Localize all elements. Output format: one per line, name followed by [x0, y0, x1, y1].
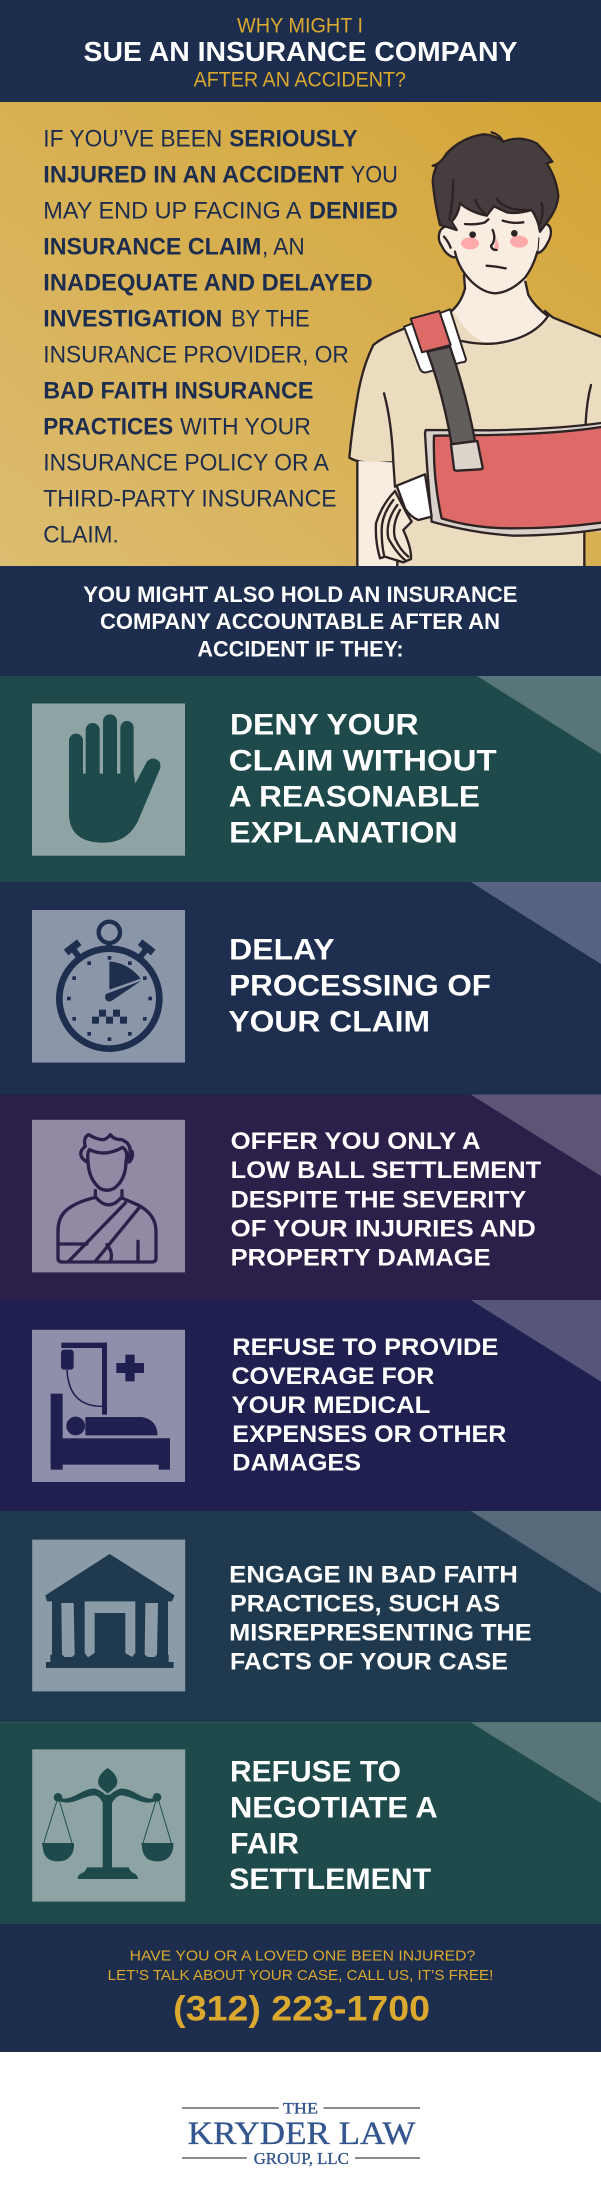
subheading text: [83, 582, 517, 662]
text: low ball: [231, 1129, 542, 1272]
text: negotiate: [229, 1756, 438, 1896]
text: coverage: REFUSE TO PROVIDE: [232, 1335, 498, 1361]
logo: the kryder law group: GROUP, LLC: [254, 2149, 349, 2168]
logo: the kryder law group: KRYDER LAW: [188, 2116, 416, 2152]
icon: stopwatch: [59, 922, 159, 1049]
text: negotiate: NEGOTIATE A: [230, 1792, 438, 1825]
intro paragraph: IF YOU’VE BEEN: [43, 126, 222, 153]
text: bad faith: FACTS OF YOUR CASE: [230, 1649, 508, 1675]
intro paragraph: , AN: [262, 234, 305, 261]
panel: refuse coverage: [0, 1300, 601, 1511]
intro paragraph: THIRD-PARTY INSURANCE: [43, 486, 337, 512]
intro paragraph: INSURANCE CLAIM: [43, 234, 261, 261]
text: bad faith: PRACTICES, SUCH AS: [230, 1591, 500, 1617]
logo: the kryder law group: THE: [283, 2101, 318, 2118]
text: deny: EXPLANATION: [229, 817, 458, 850]
panel: subheading: [0, 566, 601, 676]
text: coverage: [232, 1335, 506, 1477]
phone number: (312) 223-1700: [173, 1989, 430, 2028]
title: main heading: SUE AN INSURANCE COMPANY: [84, 36, 518, 67]
intro paragraph: MAY END UP FACING A: [43, 198, 302, 225]
call to action text: HAVE YOU OR A LOVED ONE BEEN INJURED?: [130, 1948, 475, 1964]
text: coverage: EXPENSES OR OTHER: [232, 1422, 506, 1448]
header panel: [0, 0, 601, 102]
call to action text: LET’S TALK ABOUT YOUR CASE, CALL US, IT’S FREE!: [108, 1968, 493, 1984]
panel: refuse to negotiate: [0, 1722, 601, 1924]
text: low ball: OFFER YOU ONLY A: [231, 1129, 481, 1155]
text: coverage: COVERAGE FOR: [232, 1364, 434, 1390]
text: deny: [229, 708, 497, 850]
subheading text: COMPANY ACCOUNTABLE AFTER AN: [100, 609, 500, 634]
intro paragraph: INVESTIGATION: [43, 306, 222, 332]
panel: call to action: [0, 1924, 601, 2052]
text: coverage: DAMAGES: [232, 1451, 361, 1477]
intro paragraph: BAD FAITH INSURANCE: [43, 378, 314, 404]
subheading text: YOU MIGHT ALSO HOLD AN INSURANCE: [83, 582, 517, 607]
text: low ball: LOW BALL SETTLEMENT: [231, 1158, 542, 1184]
text: deny: CLAIM WITHOUT: [229, 744, 497, 778]
panel: delay processing: [0, 882, 601, 1094]
illustration: injured man with arm sling: [349, 132, 601, 568]
logo: the kryder law group: [182, 2101, 420, 2168]
text: delay: PROCESSING OF: [229, 970, 491, 1003]
text: low ball: DESPITE THE SEVERITY: [231, 1187, 527, 1213]
icon: courthouse: [45, 1554, 175, 1668]
intro paragraph: INSURANCE PROVIDER, OR: [43, 342, 349, 368]
icon: scales of justice: [42, 1768, 173, 1879]
intro paragraph: INSURANCE POLICY OR A: [43, 450, 329, 476]
intro paragraph: [43, 126, 398, 548]
icon: hospital bed: [51, 1343, 170, 1470]
call to action text: [108, 1948, 493, 1984]
text: bad faith: [229, 1562, 532, 1675]
text: low ball: OF YOUR INJURIES AND: [231, 1216, 536, 1242]
intro paragraph: YOU: [351, 162, 398, 189]
icon: injured person: [58, 1135, 156, 1262]
text: bad faith: ENGAGE IN BAD FAITH: [229, 1562, 518, 1588]
text: negotiate: SETTLEMENT: [229, 1863, 431, 1896]
text: low ball: PROPERTY DAMAGE: [231, 1246, 491, 1272]
intro paragraph: CLAIM.: [43, 522, 119, 548]
text: delay: [228, 933, 491, 1039]
title: why might i: WHY MIGHT I: [237, 14, 363, 38]
intro paragraph: INADEQUATE AND DELAYED: [43, 270, 373, 296]
text: deny: DENY YOUR: [230, 708, 419, 742]
icon: raised hand: [69, 714, 160, 843]
intro paragraph: PRACTICES: [43, 414, 173, 440]
text: deny: A REASONABLE: [229, 781, 480, 814]
intro paragraph: DENIED: [309, 198, 398, 225]
intro paragraph: WITH YOUR: [180, 414, 311, 440]
text: negotiate: REFUSE TO: [230, 1756, 401, 1789]
panel: gold intro: [0, 102, 601, 568]
intro paragraph: SERIOUSLY: [229, 126, 358, 153]
text: negotiate: FAIR: [230, 1828, 299, 1861]
panel: bad faith practices: [0, 1511, 601, 1722]
text: delay: DELAY: [229, 933, 335, 966]
intro paragraph: BY THE: [231, 306, 310, 332]
subheading text: ACCIDENT IF THEY:: [197, 636, 404, 662]
text: bad faith: MISREPRESENTING THE: [229, 1620, 532, 1646]
panel: low ball settlement: [0, 1094, 601, 1300]
panel: deny your claim: [0, 676, 601, 882]
text: delay: YOUR CLAIM: [228, 1006, 430, 1039]
text: coverage: YOUR MEDICAL: [232, 1393, 430, 1419]
intro paragraph: INJURED IN AN ACCIDENT: [43, 162, 344, 189]
title: after an accident: AFTER AN ACCIDENT?: [194, 69, 406, 92]
